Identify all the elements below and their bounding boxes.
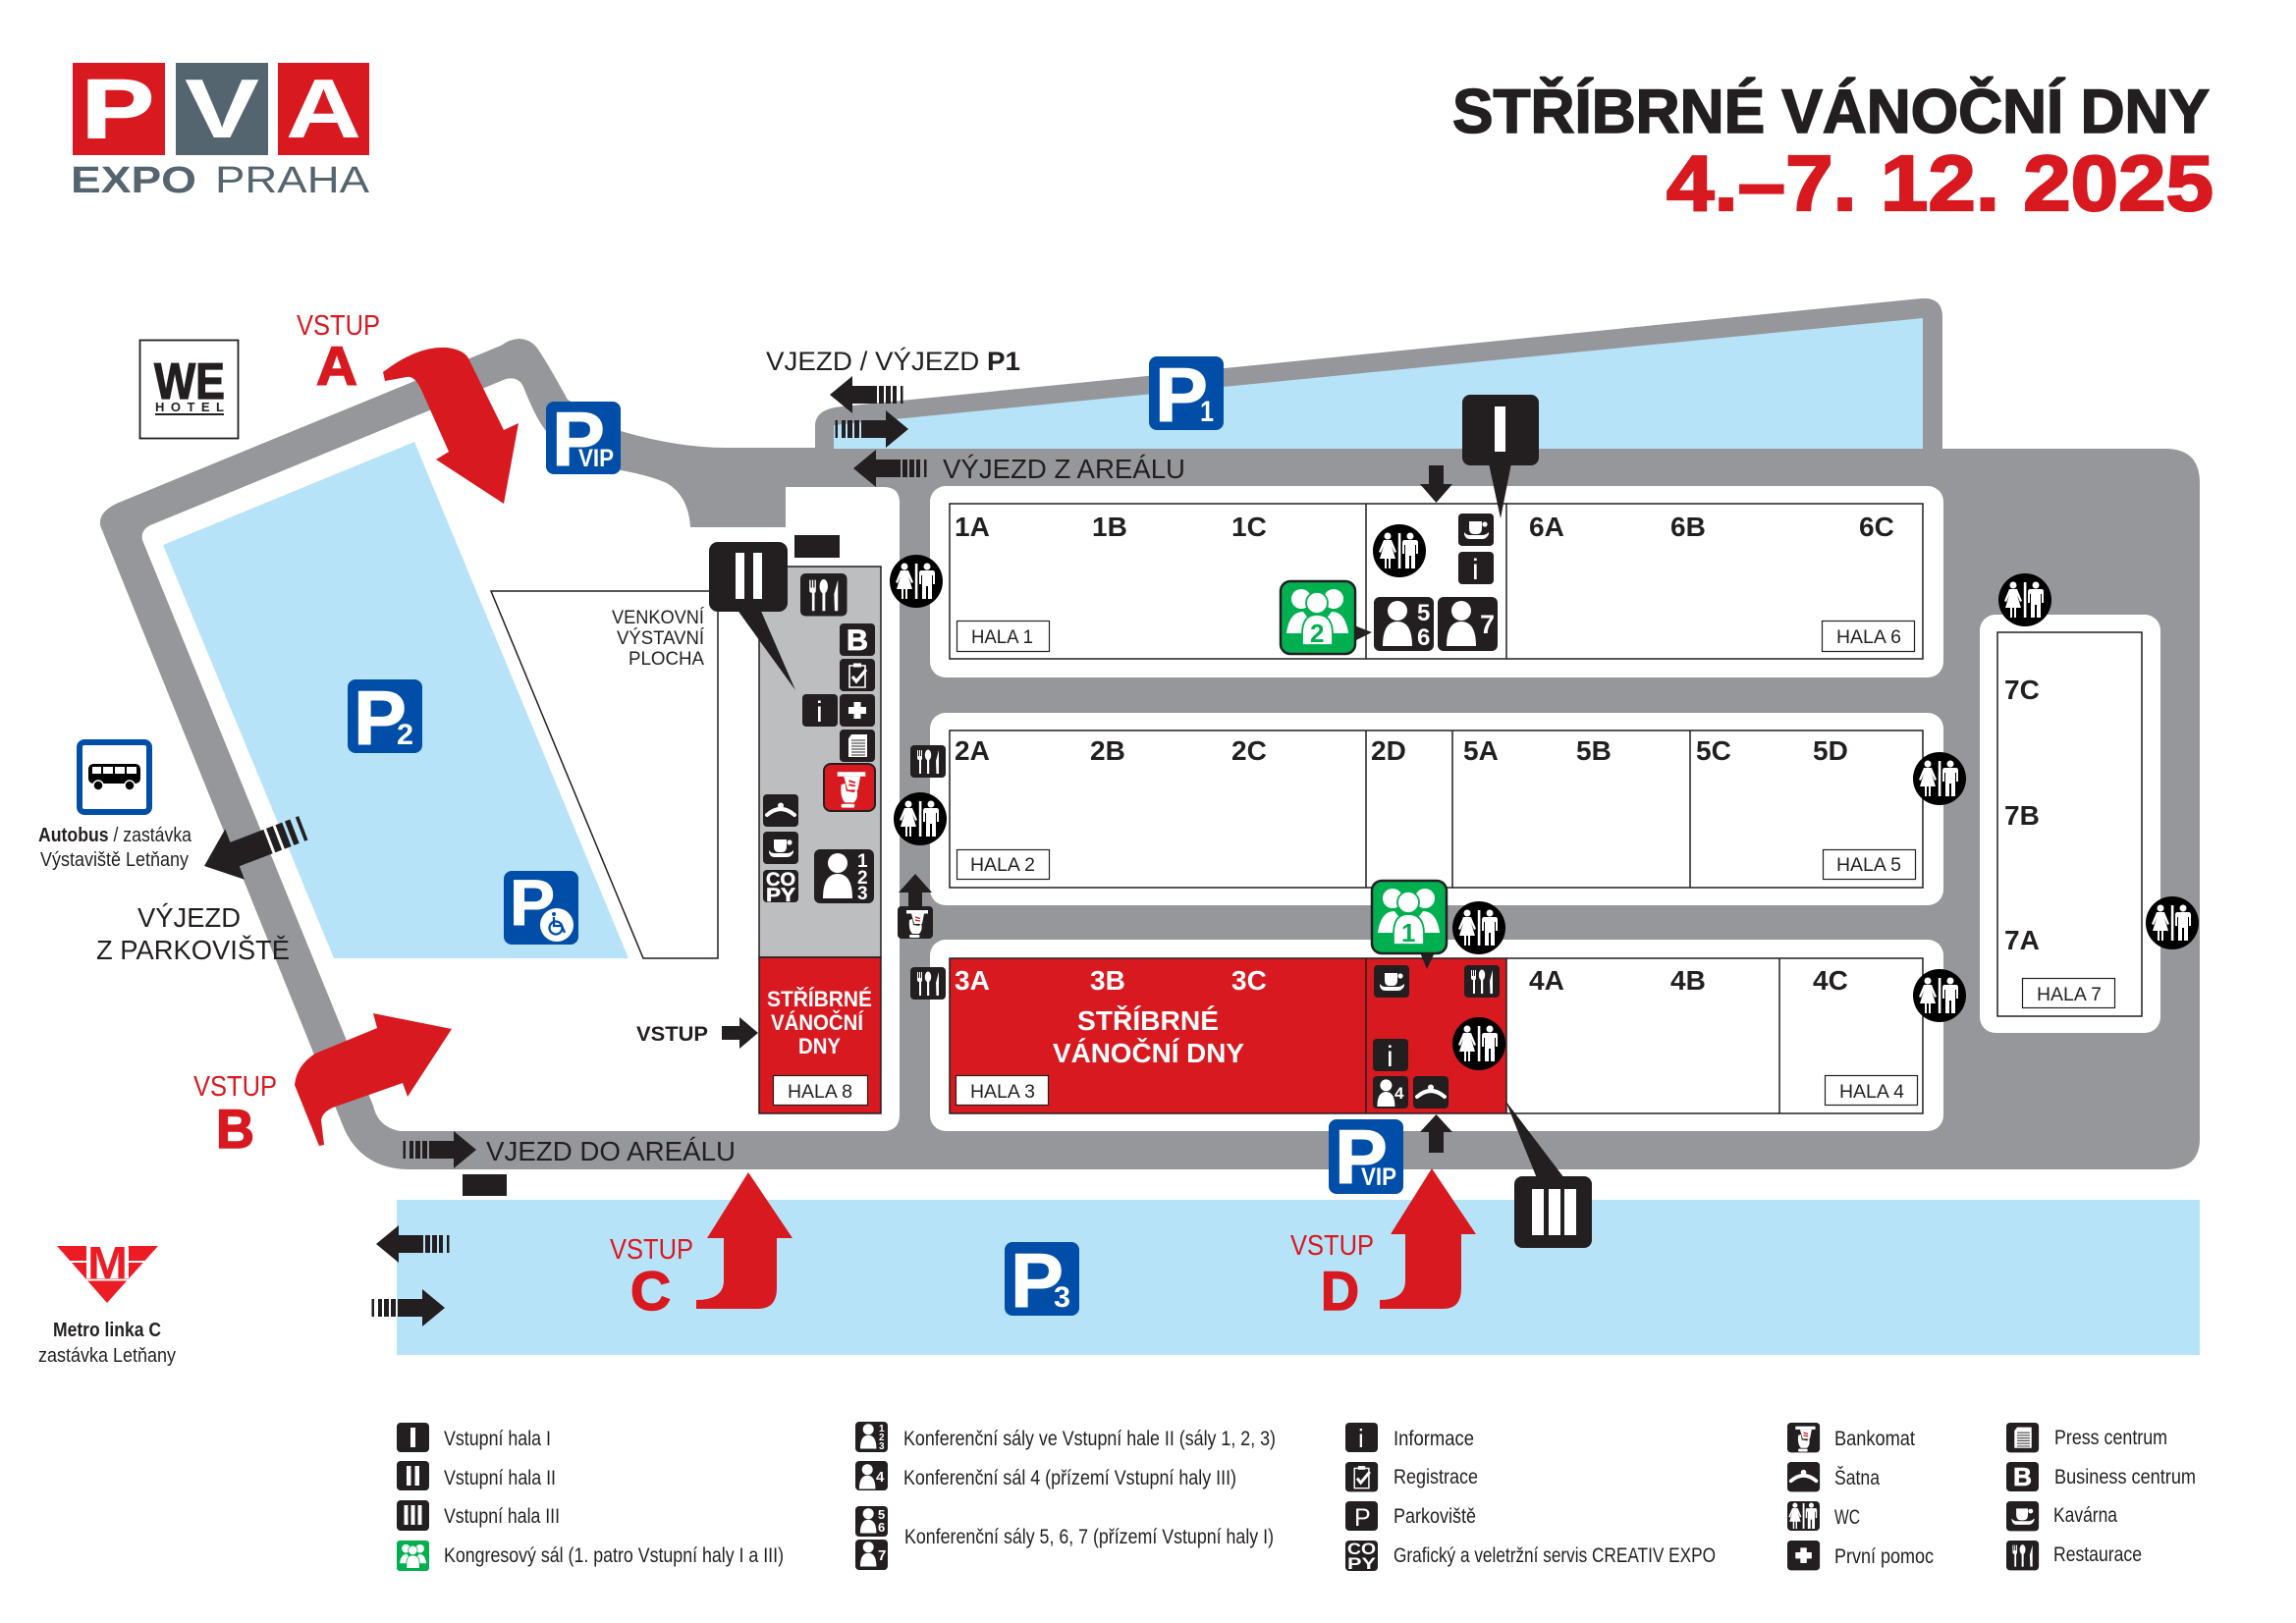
red arrow A	[383, 348, 519, 504]
road label vyjezd z arealu: VÝJEZD Z AREÁLU	[943, 454, 1185, 484]
info icon hall I foyer: i	[1472, 554, 1479, 586]
parking badge P1: P	[1155, 352, 1208, 438]
outdoor exhibition area	[491, 591, 718, 958]
hall labels: 5D	[1813, 735, 1848, 766]
legend icon room 7: 7	[878, 1547, 886, 1564]
label hala 4	[1825, 1076, 1917, 1106]
info icon hall III foyer	[1373, 1039, 1408, 1073]
label hala 2: HALA 2	[970, 855, 1035, 876]
WC by congress hall	[1452, 901, 1505, 954]
restaurant icon hall 8	[800, 573, 847, 617]
event label in hall 3: STŘÍBRNÉ	[1077, 1005, 1219, 1036]
arrow to ATM	[899, 874, 932, 908]
parking badge VIP north: VIP	[578, 445, 614, 472]
WE hotel logo	[139, 340, 238, 438]
parking exit label	[96, 902, 290, 965]
label hala 8: HALA 8	[788, 1082, 852, 1103]
cloakroom icon hall II	[763, 794, 798, 827]
arrow entry grounds	[403, 1131, 476, 1168]
legend icon WC	[1787, 1501, 1820, 1531]
parking badge P1	[1149, 352, 1224, 438]
legend icon copy: PY	[1347, 1554, 1377, 1573]
bus stop label	[38, 825, 192, 871]
legend icon first aid	[1787, 1541, 1820, 1570]
hall labels	[955, 735, 1848, 766]
congress hall badge 2	[1281, 581, 1372, 654]
conference rooms 1 2 3 icon	[814, 849, 874, 904]
parking badge VIP north	[546, 396, 621, 482]
legend icon III	[397, 1500, 429, 1531]
hall labels: 2A	[955, 735, 990, 766]
hall labels	[955, 965, 1848, 996]
hall labels: 2B	[1090, 735, 1125, 766]
legend icon parking	[1345, 1501, 1378, 1532]
hall 8 column	[759, 567, 881, 1113]
metro label	[38, 1320, 176, 1367]
parking exit label: VÝJEZD	[137, 902, 241, 933]
entrance D label: D	[1321, 1260, 1359, 1322]
legend text press centre: Press centrum	[2054, 1427, 2167, 1449]
congress hall badge 1: 1	[1401, 918, 1415, 947]
metro label: zastávka Letňany	[38, 1345, 176, 1367]
legend icon information	[1345, 1423, 1378, 1453]
ATM icon road	[898, 906, 933, 939]
red arrow D	[1380, 1168, 1476, 1309]
legend column 1	[397, 1423, 784, 1571]
congress hall badge 2: 2	[1310, 619, 1324, 648]
entrance D label: VSTUP	[1290, 1230, 1374, 1262]
label hala 1	[957, 621, 1049, 652]
info icon hall II	[802, 694, 838, 729]
legend icon II	[397, 1461, 429, 1490]
hall labels: 5B	[1576, 735, 1612, 766]
legend icon copy: CO	[1347, 1540, 1376, 1558]
entrance hall III badge	[1505, 1101, 1592, 1248]
hall block 1 and 6	[930, 486, 1943, 677]
hall labels: 1A	[955, 512, 990, 542]
parking badge P3	[1005, 1237, 1079, 1324]
conference room 7 icon	[1438, 597, 1498, 651]
legend text congress: Kongresový sál (1. patro Vstupní haly I a III)	[444, 1544, 784, 1567]
label hala 6: HALA 6	[1836, 627, 1901, 648]
label hala 7	[2023, 978, 2115, 1007]
parking badge P2: 2	[397, 719, 413, 751]
hall labels: 4B	[1670, 965, 1706, 996]
WC north west of hall 1	[890, 555, 943, 608]
hall block 7	[1980, 615, 2160, 1033]
arrow exit P1	[830, 376, 903, 413]
parking badge disabled	[504, 866, 578, 945]
hall labels: 6A	[1529, 512, 1564, 542]
hall labels: 2D	[1371, 735, 1406, 766]
label hala 2	[957, 850, 1049, 880]
cafe icon hall II	[763, 832, 798, 864]
legend icon parking: P	[1354, 1504, 1371, 1532]
cafe icon hall I foyer	[1458, 514, 1494, 546]
entrance A label: A	[316, 335, 357, 397]
logo text PRAHA: PRAHA	[215, 160, 370, 201]
cafe icon hall III foyer	[1374, 965, 1409, 998]
logo letter P: P	[82, 63, 154, 156]
parking area P1	[834, 318, 1923, 449]
hall labels: 7C	[2004, 675, 2040, 705]
label hala 3: HALA 3	[970, 1082, 1035, 1103]
legend column 3	[1345, 1423, 1716, 1573]
black marker at entry road	[463, 1174, 507, 1196]
legend text registration: Registrace	[1394, 1466, 1478, 1488]
legend icon registration	[1345, 1462, 1378, 1491]
copy service icon: CO	[766, 870, 795, 891]
label hala 7: HALA 7	[2037, 985, 2102, 1005]
cloakroom icon hall III foyer	[1413, 1076, 1449, 1109]
entrance B label	[193, 1071, 277, 1160]
legend icon rooms 1 2 3: 3	[879, 1441, 885, 1452]
hall labels: 3C	[1231, 965, 1267, 996]
red arrow B	[295, 1013, 452, 1146]
parking badge P2	[348, 675, 422, 761]
parking area P2	[163, 442, 629, 958]
WC hall III foyer	[1452, 1017, 1505, 1070]
legend text rooms 5 6 7: Konferenční sály 5, 6, 7 (přízemí Vstupní haly I)	[904, 1526, 1274, 1548]
WE hotel logo: HOTEL	[155, 400, 224, 414]
conference rooms 5 6 icon: 6	[1417, 624, 1430, 651]
legend text WC: WC	[1834, 1506, 1860, 1529]
conference rooms 1 2 3 icon: 3	[857, 884, 868, 904]
entrance B label: VSTUP	[193, 1071, 277, 1103]
restaurant icon hall III foyer	[1464, 965, 1500, 998]
logo letter V	[176, 63, 268, 156]
arrow into hall 8	[722, 1017, 758, 1049]
date: 4.–7. 12. 2025	[1667, 139, 2214, 227]
hall labels: 2C	[1231, 735, 1267, 766]
legend icon cloakroom	[1787, 1462, 1820, 1491]
bus stop label: Výstaviště Letňany	[40, 849, 189, 871]
event label in hall 3: VÁNOČNÍ DNY	[1053, 1037, 1244, 1068]
hall labels: 7A	[2004, 925, 2040, 955]
legend icon rooms 1 2 3: 1	[879, 1424, 885, 1434]
WC hall 4	[1913, 969, 1966, 1022]
bus stop label: Autobus / zastávka	[38, 825, 192, 846]
parking badge disabled: P	[510, 866, 555, 939]
copy service icon: PY	[766, 886, 795, 906]
legend icon I	[397, 1423, 429, 1452]
legend text business centre: Business centrum	[2054, 1466, 2196, 1488]
hall labels: 1B	[1092, 512, 1127, 542]
legend icon room 4: 4	[876, 1469, 885, 1486]
entrance hall I badge	[1462, 395, 1539, 518]
event label in hall 8	[767, 987, 872, 1058]
WC hall 2 west	[894, 792, 947, 845]
parking badge VIP south	[1329, 1113, 1403, 1200]
legend text parking: Parkoviště	[1394, 1505, 1476, 1528]
hall labels: 1C	[1231, 512, 1267, 542]
logo letter P	[73, 63, 165, 156]
conference rooms 5 6 icon	[1374, 597, 1434, 651]
legend icon restaurant	[2006, 1541, 2039, 1570]
parking badge P3: P	[1011, 1237, 1064, 1324]
first aid icon	[840, 694, 875, 727]
label hala 3	[957, 1076, 1049, 1106]
hall labels: 4C	[1813, 965, 1848, 996]
registration icon	[840, 659, 875, 691]
parking badge P2: P	[354, 675, 407, 761]
arrow entry P1	[835, 410, 908, 448]
label hala 4: HALA 4	[1839, 1082, 1904, 1103]
legend icon press centre	[2006, 1423, 2039, 1452]
road network	[100, 298, 2200, 1169]
business centre icon: B	[847, 624, 868, 657]
hall labels: 6B	[1670, 512, 1706, 542]
entrance A label	[297, 310, 380, 397]
press centre icon	[840, 730, 875, 762]
WC hall 7 north	[1998, 573, 2051, 626]
conference rooms 5 6 icon: 5	[1417, 600, 1430, 626]
legend text cloakroom: Šatna	[1834, 1467, 1880, 1489]
legend column 2	[855, 1422, 1276, 1570]
legend text restaurant: Restaurace	[2053, 1543, 2142, 1566]
legend icon rooms 5 6: 5	[878, 1507, 885, 1522]
conference room 7 icon: 7	[1480, 610, 1495, 639]
hall labels: 3A	[955, 965, 990, 996]
restaurant icon hall 3	[910, 967, 946, 1000]
entrance A label: VSTUP	[297, 310, 380, 342]
info icon hall III foyer: i	[1387, 1041, 1394, 1073]
congress hall badge 1	[1372, 881, 1447, 969]
conference rooms 1 2 3 icon: 2	[857, 868, 868, 889]
road label vjezd do arealu: VJEZD DO AREÁLU	[486, 1136, 736, 1166]
arrow down to hall I	[1420, 465, 1452, 503]
outdoor area label: VÝSTAVNÍ	[617, 628, 705, 649]
event label in hall 8: STŘÍBRNÉ	[767, 987, 872, 1011]
hall labels: 3B	[1090, 965, 1125, 996]
title: STŘÍBRNÉ VÁNOČNÍ DNY	[1452, 77, 2210, 146]
legend icon ATM	[1787, 1423, 1820, 1452]
parking badge P3: 3	[1054, 1281, 1070, 1314]
road label vjezd vyjezd P1: VJEZD / VÝJEZD P1	[766, 347, 1020, 376]
legend text II: Vstupní hala II	[444, 1467, 556, 1489]
copy service icon	[763, 870, 798, 906]
parking exit label: Z PARKOVIŠTĚ	[96, 935, 290, 965]
legend text cafe: Kavárna	[2053, 1504, 2117, 1527]
hall labels: 5C	[1696, 735, 1731, 766]
logo letter V: V	[185, 63, 259, 156]
info icon hall I foyer	[1458, 552, 1494, 586]
logo letter A: A	[286, 63, 361, 156]
hall labels	[2004, 675, 2040, 955]
WC hall 5	[1913, 752, 1966, 805]
metro logo: M	[87, 1237, 128, 1288]
inner exhibition ground	[142, 378, 900, 1131]
red arrow C	[696, 1172, 793, 1309]
legend text information: Informace	[1394, 1428, 1474, 1450]
legend text rooms 1 2 3: Konferenční sály ve Vstupní hale II (sály 1, 2, 3)	[903, 1428, 1276, 1450]
arrow up to hall III	[1420, 1114, 1452, 1153]
hall block 2 and 5	[930, 713, 1943, 905]
legend icon cafe	[2006, 1501, 2039, 1531]
metro label: Metro linka C	[53, 1320, 161, 1341]
hall labels: 4A	[1529, 965, 1564, 996]
business centre icon	[840, 623, 875, 657]
conference room 4 icon: 4	[1394, 1084, 1404, 1103]
arrow exit grounds	[853, 450, 927, 487]
legend text ATM: Bankomat	[1834, 1428, 1915, 1450]
legend icon rooms 5 6: 6	[878, 1520, 885, 1535]
label hala 1: HALA 1	[971, 627, 1033, 648]
entrance C label: C	[630, 1260, 671, 1322]
parking badge P1: 1	[1200, 396, 1214, 428]
legend icon room 7	[855, 1540, 888, 1570]
logo text EXPO: EXPO	[71, 160, 196, 201]
legend icon business centre: B	[2013, 1462, 2032, 1491]
legend icon information: i	[1358, 1424, 1364, 1453]
WE hotel logo: WE	[154, 353, 225, 410]
legend icon rooms 1 2 3	[855, 1422, 888, 1452]
event label in hall 8: DNY	[798, 1034, 841, 1058]
legend text III: Vstupní hala III	[444, 1505, 560, 1528]
hall 8 entry label: VSTUP	[636, 1023, 708, 1046]
ATM icon red	[824, 764, 875, 811]
arrow entry P3	[371, 1289, 445, 1326]
legend icon rooms 5 6	[855, 1506, 888, 1537]
legend text first aid: První pomoc	[1834, 1545, 1934, 1568]
hall block 3 and 4	[930, 940, 1943, 1131]
legend column 4	[1787, 1423, 1934, 1570]
entrance C label: VSTUP	[610, 1234, 693, 1266]
conference rooms 1 2 3 icon: 1	[857, 851, 868, 872]
WC hall 7 east	[2146, 896, 2199, 949]
outdoor area label: VENKOVNÍ	[612, 608, 705, 628]
parking area P3	[397, 1200, 2200, 1355]
legend text room 4: Konferenční sál 4 (přízemí Vstupní haly III)	[903, 1467, 1236, 1489]
legend icon copy	[1345, 1540, 1378, 1573]
event label in hall 8: VÁNOČNÍ	[771, 1010, 864, 1035]
label hala 5	[1823, 850, 1915, 880]
logo letter A	[278, 63, 369, 156]
label hala 6	[1823, 621, 1915, 652]
entrance D label	[1290, 1230, 1374, 1322]
label hala 5: HALA 5	[1836, 855, 1901, 876]
label hala 8	[774, 1076, 868, 1106]
legend icon congress	[397, 1541, 429, 1571]
entrance B label: B	[216, 1098, 254, 1160]
WC hall I foyer	[1373, 524, 1426, 577]
entrance hall II badge	[709, 542, 795, 690]
legend icon room 4	[855, 1461, 888, 1490]
outdoor area label	[612, 608, 705, 670]
metro logo	[57, 1237, 158, 1303]
parking badge VIP south: P	[1335, 1113, 1388, 1200]
legend column 5	[2006, 1423, 2196, 1570]
parking badge VIP south: VIP	[1361, 1163, 1396, 1191]
outdoor area label: PLOCHA	[629, 649, 704, 670]
hall labels: 5A	[1463, 735, 1499, 766]
legend icon business centre	[2006, 1462, 2039, 1491]
arrow exit P3	[376, 1225, 450, 1263]
legend text I: Vstupní hala I	[444, 1428, 551, 1450]
legend icon rooms 1 2 3: 2	[879, 1433, 885, 1443]
info icon hall II: i	[816, 696, 823, 729]
arrow parking exit	[194, 803, 313, 892]
event label in hall 3	[1053, 1005, 1244, 1068]
entrance C label	[610, 1234, 693, 1322]
bus stop icon	[80, 742, 149, 812]
logo: PVA EXPO PRAHA	[71, 63, 370, 201]
conference room 4 icon	[1373, 1076, 1408, 1109]
black marker at hall II	[794, 535, 840, 558]
parking badge VIP north: P	[552, 396, 605, 482]
hall labels: 7B	[2004, 800, 2040, 831]
legend text copy service: Grafický a veletržní servis CREATIV EXPO	[1394, 1544, 1716, 1567]
hall labels	[955, 512, 1894, 542]
hall labels: 6C	[1859, 512, 1894, 542]
restaurant icon hall 2	[910, 745, 946, 778]
